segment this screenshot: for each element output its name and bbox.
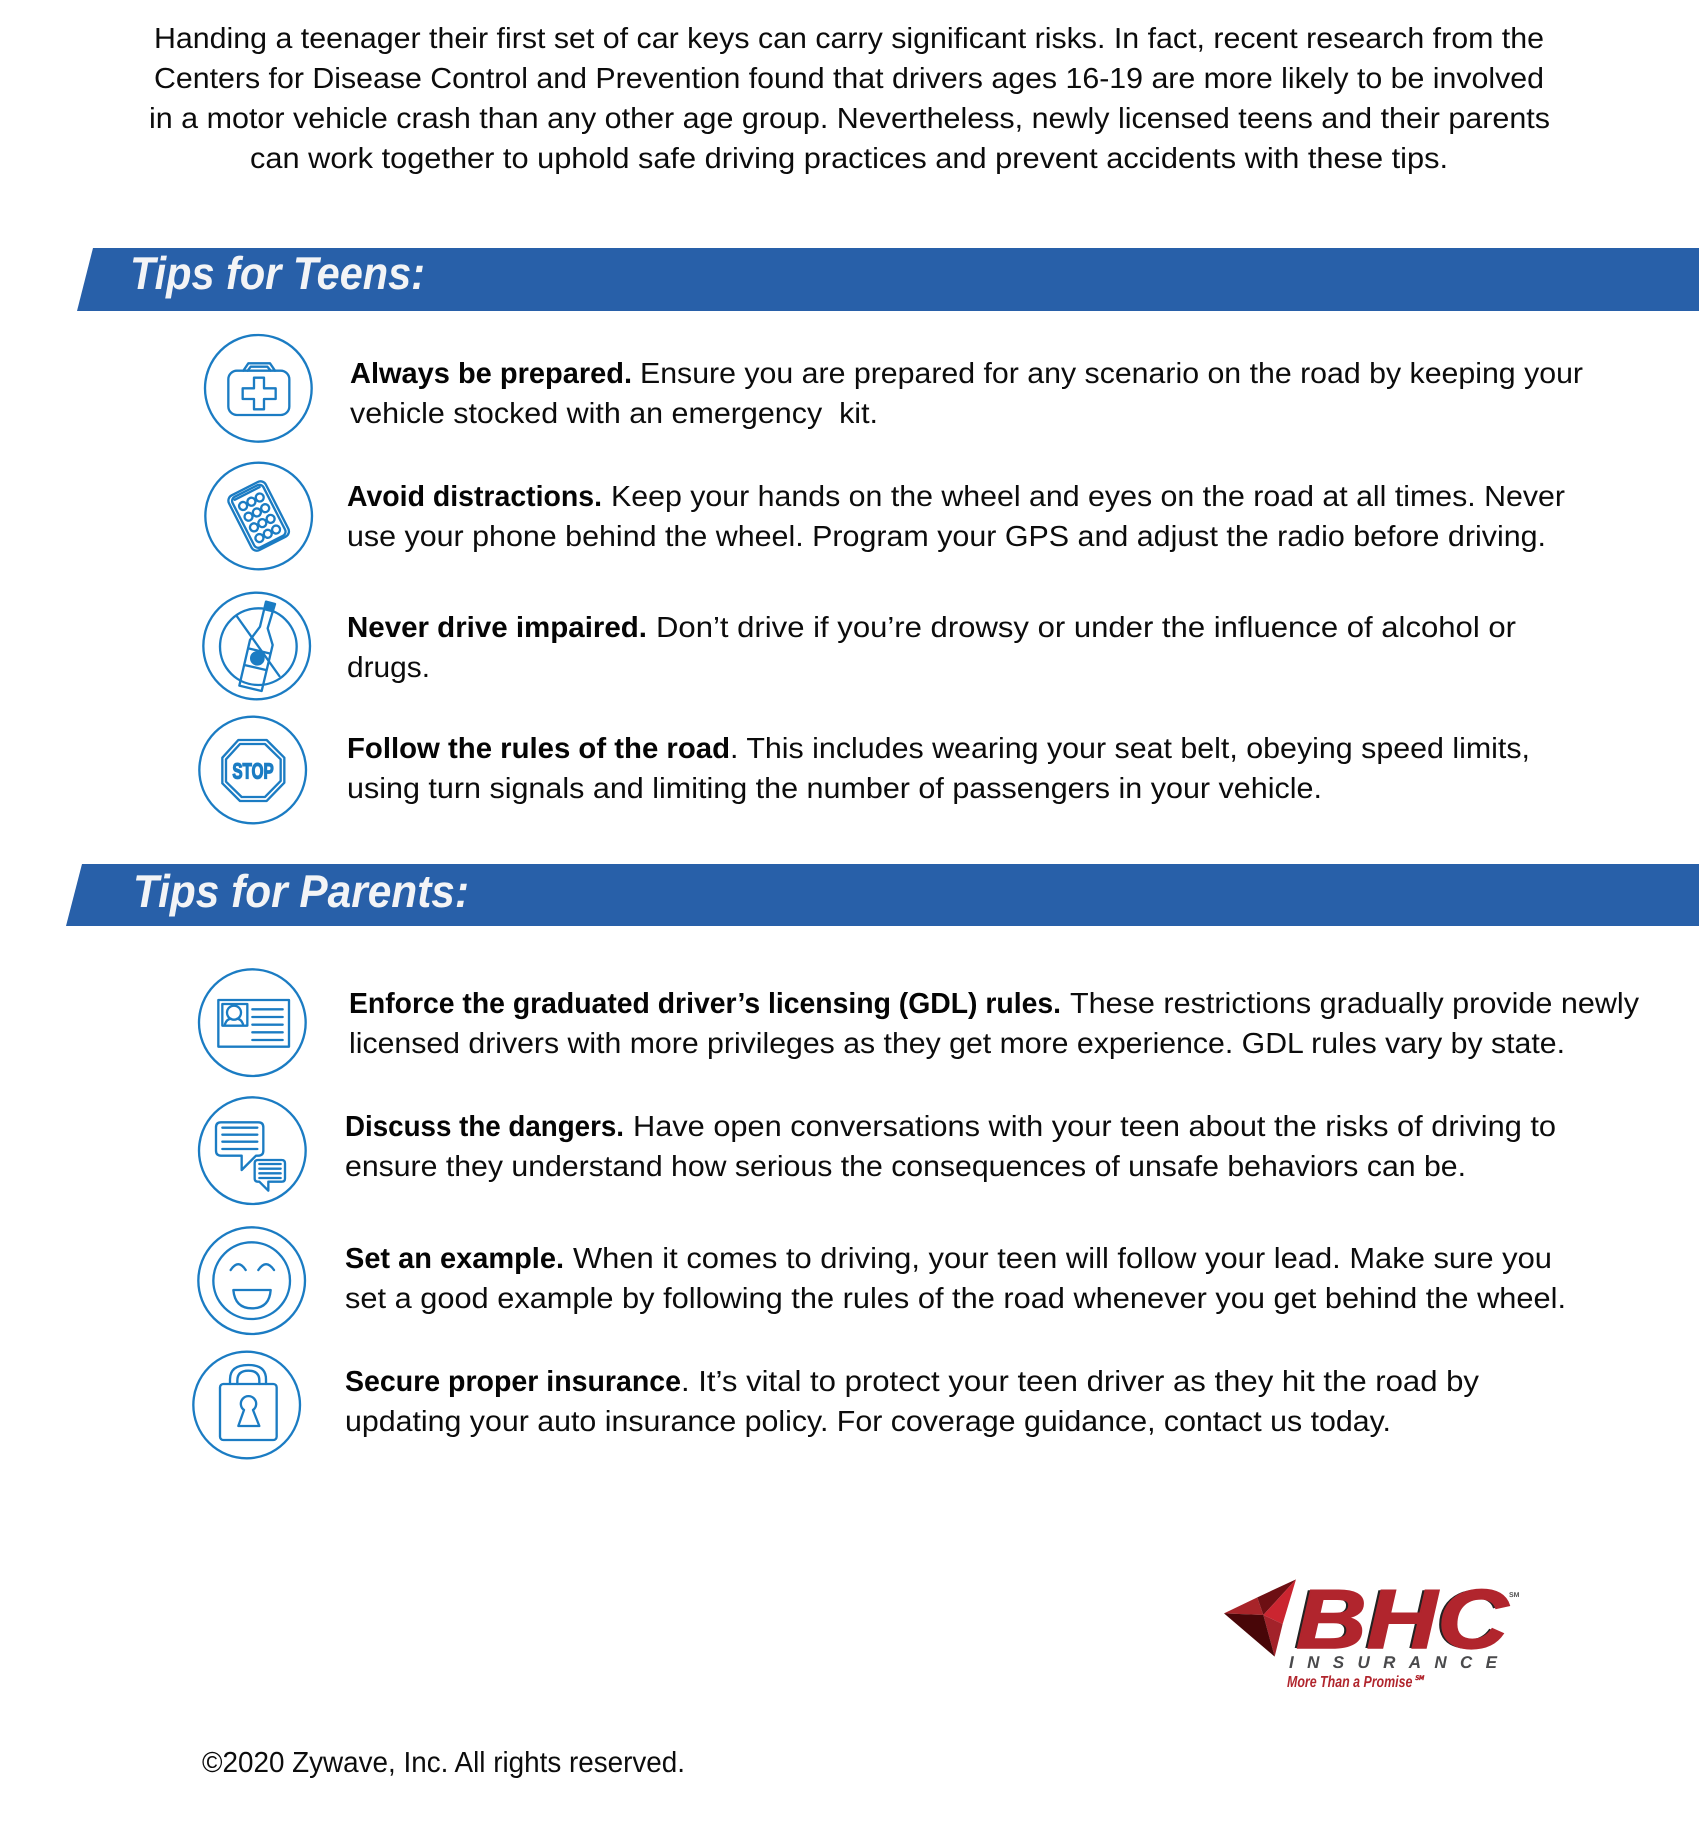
- tip: never drive impaired: [347, 612, 1516, 684]
- icon: phone keypad: [205, 463, 312, 569]
- tip: follow the rules of the road: . This includes wearing your seat belt, obeying speed limits,: [730, 733, 1530, 765]
- icon: no alcohol bottle: [203, 593, 310, 699]
- tip: never drive impaired: Don’t drive if you’re drowsy or under the influence of alcohol or: [656, 612, 1516, 644]
- intro paragraph: Centers for Disease Control and Prevention found that drivers ages 16-19 are more likely to be involved: [154, 63, 1544, 95]
- tip: always be prepared: Ensure you are prepared for any scenario on the road by keeping your: [640, 358, 1583, 390]
- tip: follow the rules of the road: [347, 733, 1530, 805]
- logo mark: red faceted arrow: [1224, 1579, 1296, 1657]
- tip: follow the rules of the road: Follow the rules of the road: [347, 733, 730, 765]
- tip: enforce GDL rules: licensed drivers with more privileges as they get more experience. GDL rules vary by state.: [349, 1028, 1565, 1060]
- heading banner: Tips for Teens: Tips for Teens:: [130, 247, 425, 299]
- icon: stop sign: STOP: [232, 758, 274, 783]
- icon: padlock: [193, 1352, 300, 1458]
- tip: follow the rules of the road: using turn signals and limiting the number of passengers in your vehicle.: [347, 773, 1322, 805]
- logo wordmark: BHC: BHC: [1293, 1572, 1507, 1666]
- intro paragraph: can work together to uphold safe driving practices and prevent accidents with these tips.: [250, 143, 1448, 175]
- intro paragraph: in a motor vehicle crash than any other age group. Nevertheless, newly licensed teens and their parents: [149, 103, 1550, 135]
- panel: tips for parents: [66, 864, 1699, 1458]
- icon: smiling face: [198, 1227, 305, 1334]
- tip: discuss the dangers: ensure they understand how serious the consequences of unsafe behaviors can be.: [345, 1151, 1466, 1183]
- tip: never drive impaired: Never drive impaired.: [347, 612, 647, 644]
- tip: discuss the dangers: Have open conversations with your teen about the risks of driving to: [633, 1111, 1556, 1143]
- tip: enforce GDL rules: Enforce the graduated driver’s licensing (GDL) rules.: [349, 988, 1061, 1020]
- tip: enforce GDL rules: [349, 988, 1640, 1060]
- tip: avoid distractions: [347, 481, 1565, 553]
- tip: set an example: When it comes to driving, your teen will follow your lead. Make sure you: [573, 1243, 1552, 1275]
- tip: set an example: Set an example.: [345, 1243, 564, 1275]
- tip: secure proper insurance: . It’s vital to protect your teen driver as they hit the road by: [681, 1366, 1480, 1398]
- icon: first aid kit: [205, 335, 312, 442]
- tip: secure proper insurance: [345, 1366, 1480, 1438]
- logo wordmark: BHC: BHC: [1296, 1572, 1510, 1666]
- intro paragraph: Handing a teenager their first set of car keys can carry significant risks. In fact, recent research from the: [154, 23, 1544, 55]
- tip: secure proper insurance: updating your auto insurance policy. For coverage guidance, contact us today.: [345, 1406, 1391, 1438]
- copyright line: ©2020 Zywave, Inc. All rights reserved.: [202, 1747, 685, 1779]
- logo tagline: More Than a Promise℠: [1287, 1674, 1425, 1691]
- heading banner: Tips for Teens: [77, 247, 1699, 311]
- tip: avoid distractions: use your phone behind the wheel. Program your GPS and adjust the radio before driving.: [347, 521, 1546, 553]
- heading banner: Tips for Parents: Tips for Parents:: [133, 865, 469, 917]
- tip: always be prepared: Always be prepared.: [350, 358, 632, 390]
- tip: always be prepared: vehicle stocked with an emergency kit.: [350, 398, 878, 430]
- tip: avoid distractions: Keep your hands on the wheel and eyes on the road at all times. Never: [611, 481, 1565, 513]
- logo: BHC Insurance: [1224, 1572, 1520, 1691]
- logo text: INSURANCE: INSURANCE: [1289, 1653, 1498, 1672]
- intro paragraph: [149, 23, 1550, 175]
- tip: discuss the dangers: Discuss the dangers.: [345, 1111, 624, 1143]
- panel: tips for teens: [77, 247, 1699, 823]
- tip: avoid distractions: Avoid distractions.: [347, 481, 602, 513]
- tip: enforce GDL rules: These restrictions gradually provide newly: [1070, 988, 1640, 1020]
- tip: secure proper insurance: Secure proper insurance: [345, 1366, 681, 1398]
- heading banner: Tips for Parents: [66, 864, 1699, 926]
- icon: stop sign: [199, 717, 306, 823]
- tip: never drive impaired: drugs.: [347, 652, 430, 684]
- icon: driver licence card: [199, 969, 306, 1076]
- tip: set an example: [345, 1243, 1566, 1315]
- logo wordmark: BHC: SM: [1509, 1592, 1520, 1599]
- tip: always be prepared: [350, 358, 1583, 430]
- tip: discuss the dangers: [345, 1111, 1556, 1183]
- icon: speech bubbles: [199, 1097, 306, 1204]
- tip: set an example: set a good example by following the rules of the road whenever you get behind the wheel.: [345, 1283, 1566, 1315]
